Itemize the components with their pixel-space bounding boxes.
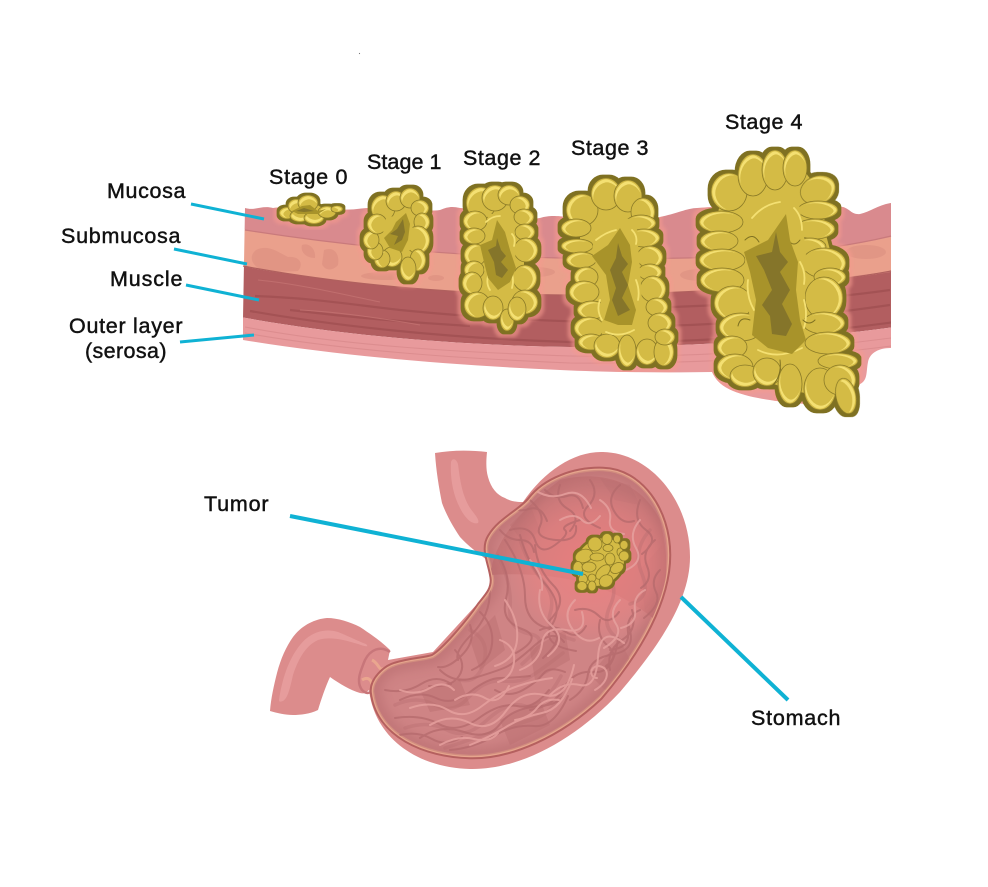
label: Tumor: Tumor [204, 492, 268, 516]
label: Outer layer (serosa): (serosa) [85, 339, 166, 363]
heading: Stage 0: Stage 0 [269, 165, 348, 189]
heading: Stage 1: Stage 1 [367, 150, 442, 174]
heading: Stage 3: Stage 3 [571, 136, 649, 160]
wide fold shadows [395, 530, 650, 748]
stomach inner lining [373, 470, 668, 756]
fold cells [420, 616, 629, 739]
serosa fibres [245, 327, 891, 363]
heading: Stage 2: Stage 2 [463, 146, 540, 170]
layer: muscle [240, 266, 895, 347]
arrow: Serosa leader [180, 335, 254, 342]
muscle fibres [250, 290, 895, 342]
label: Outer layer (serosa): Outer layer [69, 314, 182, 338]
label: Outer layer (serosa) [69, 314, 182, 363]
stomach outer body [270, 451, 690, 769]
stomach cavity and rugae folds [373, 470, 680, 756]
tumor: stage 1 [363, 188, 430, 281]
arrow: Tumor leader [290, 516, 583, 574]
layer: submucosa [240, 229, 895, 295]
heading: Stage 4: Stage 4 [725, 110, 803, 134]
arrow: Mucosa leader [191, 204, 264, 219]
pylorus ring [359, 649, 390, 693]
tumor in stomach [566, 528, 634, 596]
tumor: stage 4 [699, 150, 860, 416]
tumor: stage 0 [279, 195, 343, 224]
panel: stomach wall cross-section [240, 200, 895, 420]
duodenum highlight [279, 631, 367, 702]
stomach illustration [270, 451, 690, 769]
tumor: stage 2 [462, 185, 538, 331]
tumor: stage 3 [561, 178, 675, 367]
boundary lines [243, 230, 891, 295]
layer: mucosa [240, 200, 895, 259]
label: Muscle: Muscle [110, 267, 182, 291]
layer: serosa [243, 318, 891, 404]
arrow: Submucosa leader [174, 249, 247, 264]
tumor glow [516, 496, 666, 630]
label: Stomach: Stomach [751, 706, 840, 730]
label: Mucosa: Mucosa [107, 179, 186, 203]
label: Submucosa: Submucosa [61, 224, 181, 248]
esophagus highlight [451, 459, 478, 523]
arrow: Stomach leader [681, 597, 788, 700]
submucosa blotches [252, 244, 886, 281]
arrow: Muscle leader [186, 285, 259, 300]
